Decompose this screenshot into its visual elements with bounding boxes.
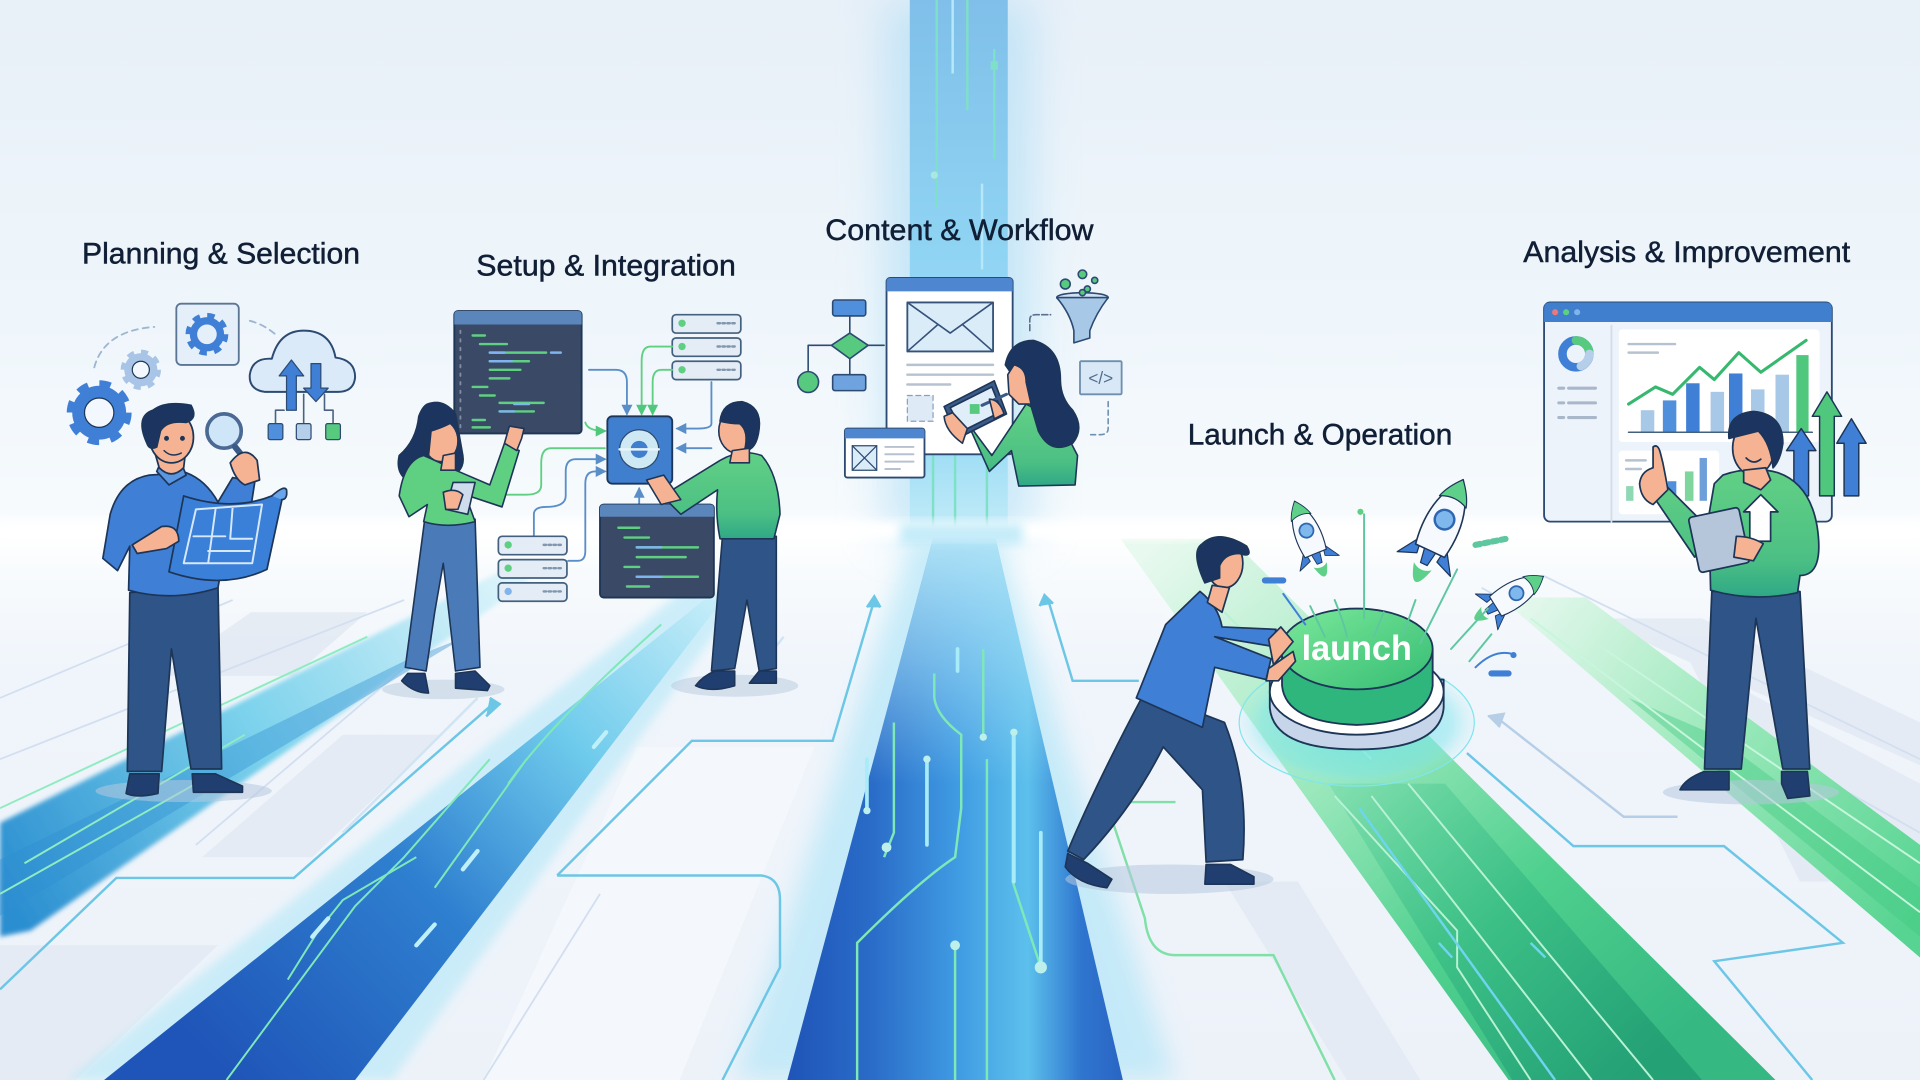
glow: central beam (884, 0, 1033, 539)
shadow (1663, 780, 1839, 804)
button label: launch (1302, 628, 1412, 668)
icon: small gear (124, 353, 158, 387)
small window card (845, 429, 924, 478)
connector arrows (475, 347, 711, 561)
shadow (1065, 864, 1273, 894)
small chart (1619, 451, 1719, 514)
icon: code box: </> (1088, 368, 1113, 388)
code window bottom (600, 504, 714, 598)
figure: man with blueprint (103, 404, 287, 796)
shadows (382, 680, 504, 699)
dashed arrows (94, 321, 277, 367)
figure: man with tablet (1640, 411, 1819, 798)
motion lines (1265, 509, 1517, 673)
servers top (672, 315, 741, 380)
panel: launch (1065, 467, 1555, 894)
left stream outer (0, 566, 529, 937)
heading: Planning & Selection: Planning & Selection (82, 237, 360, 270)
line and bar chart (1619, 329, 1820, 442)
horizon glow across central beam (900, 524, 1022, 544)
dashboard (1544, 302, 1832, 522)
heading: Launch & Operation: Launch & Operation (1188, 418, 1452, 451)
floor plates (0, 612, 1920, 1080)
figure: woman with tablet (944, 340, 1079, 486)
donut chart (1562, 340, 1589, 367)
horizon glow (0, 522, 1920, 539)
email document (887, 278, 1013, 454)
heading: Analysis & Improvement: Analysis & Improvement (1523, 236, 1851, 269)
central vertical beam (910, 0, 1008, 534)
icon: code box (1080, 361, 1122, 435)
panel: content (798, 270, 1122, 486)
icon: gear card (176, 304, 239, 365)
left stream main (67, 588, 741, 1080)
shadow (96, 780, 272, 802)
panel: setup (382, 311, 798, 699)
servers bottom (498, 536, 567, 601)
circuit traces (0, 595, 1843, 1080)
icon: large gear (71, 384, 127, 441)
central lower stream (735, 539, 1176, 1080)
icon: cloud (250, 331, 355, 440)
heading: Content & Workflow: Content & Workflow (825, 214, 1094, 247)
figure: man pushing (1065, 537, 1296, 888)
figure: man (647, 402, 780, 689)
heading: Setup & Integration: Setup & Integration (476, 250, 736, 283)
icon: integration hub (607, 416, 672, 484)
code window top (454, 311, 582, 433)
floor perspective lines (0, 576, 1920, 1080)
rockets (1275, 467, 1555, 637)
panel: planning (71, 304, 355, 802)
button glow (1239, 659, 1474, 786)
launch button (1270, 609, 1444, 749)
legend rows (1559, 388, 1596, 418)
right stream upper (1500, 598, 1920, 958)
right stream lower (1120, 539, 1776, 1080)
icon: flowchart (798, 300, 884, 392)
figure: woman (398, 402, 524, 693)
panel: analysis (1544, 302, 1866, 804)
growth arrows (1787, 392, 1866, 496)
icon: funnel (1030, 270, 1108, 343)
